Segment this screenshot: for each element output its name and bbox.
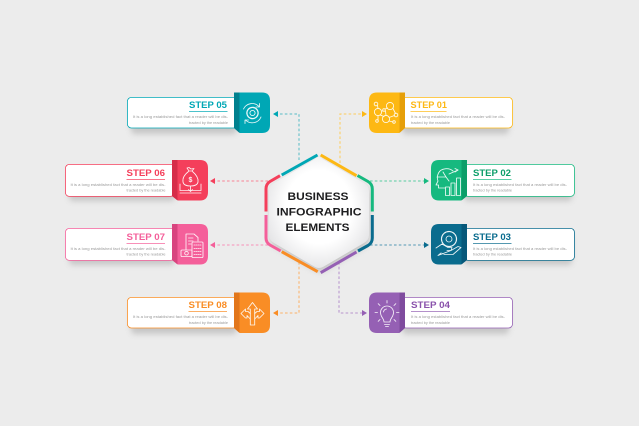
panel: step 02: STEP 02 xyxy=(473,168,511,179)
hexagon title xyxy=(276,191,362,234)
icon: gear with cycle arrows xyxy=(244,104,261,124)
icon: people network xyxy=(374,102,398,123)
panel: step 01: It is a long established fact that a reader will be dis- xyxy=(411,115,506,119)
panel: step 08 xyxy=(127,292,270,334)
connector: step 07 xyxy=(210,242,268,248)
panel: step 06: It is a long established fact that a reader will be dis- xyxy=(70,183,166,187)
panel: step 08: It is a long established fact that a reader will be dis- xyxy=(133,315,229,319)
panel: step 07 xyxy=(65,224,208,265)
connector: step 08 xyxy=(273,262,299,316)
panel: step 03 xyxy=(431,224,574,265)
panel: step 01: STEP 01 xyxy=(410,100,448,111)
icon: money bag on tray: $ xyxy=(189,177,193,184)
panel: step 06: tracted by the readable xyxy=(126,188,166,192)
panel: step 05: tracted by the readable xyxy=(189,121,228,125)
icon: hands holding gear xyxy=(436,232,461,256)
connector: step 01 xyxy=(340,111,367,163)
panel: step 04: STEP 04 xyxy=(411,300,451,311)
icon: document and calculator xyxy=(181,234,203,258)
panel: step 05 xyxy=(127,92,270,134)
panel: step 04: tracted by the readable xyxy=(411,321,450,325)
panel: step 03: STEP 03 xyxy=(473,232,511,243)
panel: step 02: It is a long established fact that a reader will be dis- xyxy=(473,183,568,187)
connector: step 05 xyxy=(273,111,299,160)
panel: step 07: It is a long established fact that a reader will be dis- xyxy=(70,247,166,251)
icon: light bulb xyxy=(375,300,399,326)
panel: step 01: tracted by the readable xyxy=(411,121,450,125)
panel: step 04 xyxy=(369,292,512,334)
connector: step 03 xyxy=(370,242,429,248)
panel: step 02: tracted by the readable xyxy=(473,188,512,192)
hexagon title: INFOGRAPHIC xyxy=(276,206,362,218)
hexagon title: ELEMENTS xyxy=(286,222,350,234)
central hexagon xyxy=(266,155,372,273)
panel: step 03: tracted by the readable xyxy=(473,252,512,256)
panel: step 04: It is a long established fact that a reader will be dis- xyxy=(411,315,506,319)
panel: step 01 xyxy=(369,92,512,134)
panel: step 05: It is a long established fact that a reader will be dis- xyxy=(133,115,229,119)
panel: step 02 xyxy=(431,160,574,201)
panel: step 08: STEP 08 xyxy=(188,300,228,311)
panel: step 06 xyxy=(65,160,208,201)
panel: step 06: STEP 06 xyxy=(126,168,165,179)
connector: step 02 xyxy=(370,178,429,184)
panel: step 05: STEP 05 xyxy=(189,100,228,111)
icon: money bag on tray xyxy=(180,168,201,193)
hexagon title: BUSINESS xyxy=(288,191,348,203)
panel: step 08: tracted by the readable xyxy=(189,321,228,325)
icon: three-way arrows xyxy=(241,302,264,325)
hexagon ring segments xyxy=(266,155,372,273)
panel: step 07: tracted by the readable xyxy=(126,252,166,256)
panel: step 07: STEP 07 xyxy=(126,232,165,243)
connector: step 06 xyxy=(210,178,268,184)
connector: step 04 xyxy=(339,262,367,316)
panel: step 03: It is a long established fact that a reader will be dis- xyxy=(473,247,568,251)
icon: head with bar chart xyxy=(436,168,460,196)
